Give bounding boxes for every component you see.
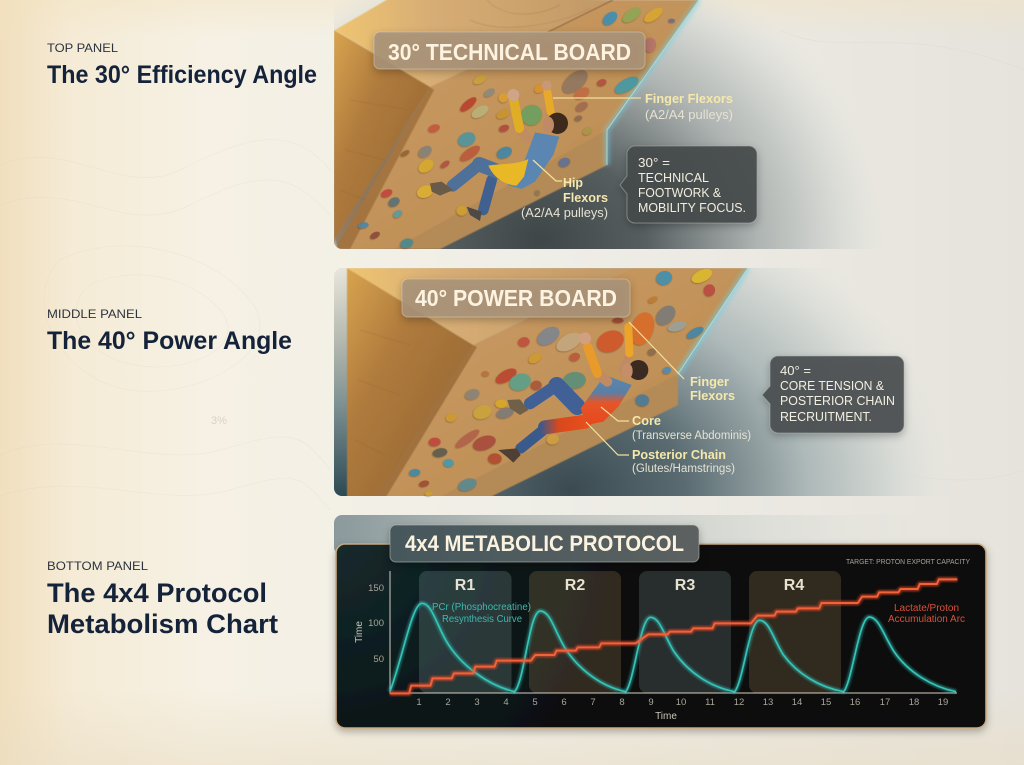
heading: bottom panel	[47, 559, 278, 639]
axes: 19	[938, 697, 948, 708]
axes: 4	[503, 697, 509, 708]
heading: bottom panel: Metabolism Chart	[47, 609, 278, 639]
axes: 150	[368, 583, 384, 594]
climber with highlighted finger and hip flexors	[430, 81, 568, 221]
label: finger flexors: Finger Flexors	[645, 91, 733, 106]
heading: middle panel	[47, 307, 292, 355]
axes: 100	[368, 618, 384, 629]
round columns: R3	[675, 577, 695, 594]
chart card	[336, 544, 986, 728]
badge: 30 degree technical board: 30° TECHNICAL BOARD	[388, 39, 631, 65]
panel backdrop	[334, 515, 954, 555]
panel: 30 degree technical board	[334, 0, 856, 250]
axes: 15	[821, 697, 831, 708]
round columns: R2	[565, 577, 585, 594]
axes: 12	[734, 697, 744, 708]
curve label: PCr	[432, 602, 531, 625]
label: hip flexors	[521, 160, 608, 220]
axes: 6	[561, 697, 567, 708]
axes: 8	[619, 697, 625, 708]
heading: top panel: TOP PANEL	[47, 41, 118, 55]
round columns: R4	[784, 577, 804, 594]
callout: core tension: RECRUITMENT.	[780, 409, 872, 424]
target note: TARGET: PROTON EXPORT CAPACITY	[846, 557, 970, 566]
badge: 40 degree power board	[402, 279, 630, 317]
callout: core tension	[762, 356, 904, 433]
axes: 1	[416, 697, 422, 708]
label: hip flexors: Flexors	[563, 190, 608, 205]
curve label: lactate: Accumulation Arc	[888, 614, 965, 625]
PCr resynthesis curve	[390, 603, 956, 692]
heading: middle panel: The 40° Power Angle	[47, 327, 292, 355]
panel backdrop	[334, 268, 974, 496]
label: hip flexors: (A2/A4 pulleys)	[521, 206, 608, 220]
edge glow	[678, 268, 748, 374]
label: core: Core	[632, 413, 661, 428]
badge: 4x4 metabolic protocol: 4x4 METABOLIC PROTOCOL	[405, 531, 684, 556]
label: posterior chain	[586, 422, 735, 475]
climbing holds	[408, 266, 716, 496]
axes: Time	[655, 711, 677, 722]
label: core: (Transverse Abdominis)	[632, 430, 751, 442]
label: finger flexors: Finger	[690, 374, 729, 389]
climber with highlighted core and posterior chain	[498, 327, 648, 463]
axes: 18	[909, 697, 919, 708]
lactate accumulation step line	[390, 579, 957, 693]
heading: bottom panel: BOTTOM PANEL	[47, 559, 148, 573]
label: core	[601, 407, 751, 442]
label: posterior chain: (Glutes/Hamstrings)	[632, 463, 735, 475]
axes: 17	[880, 697, 890, 708]
axes: 2	[445, 697, 451, 708]
edge glow	[607, 0, 699, 165]
label: hip flexors: Hip	[563, 175, 583, 190]
climbing wall	[347, 268, 748, 497]
callout: core tension: POSTERIOR CHAIN	[780, 393, 895, 408]
curve label: PCr: PCr (Phosphocreatine)	[432, 602, 531, 613]
axes	[354, 571, 957, 722]
heading: bottom panel: The 4x4 Protocol	[47, 578, 267, 608]
callout: technical footwork	[620, 146, 757, 223]
callout: core tension: 40° =	[780, 363, 811, 378]
callout: core tension: CORE TENSION &	[780, 378, 884, 393]
panel backdrop	[334, 0, 856, 249]
round columns: R1	[455, 577, 475, 594]
climbing holds	[358, 5, 675, 250]
axes: 11	[705, 697, 715, 708]
axes: 14	[792, 697, 802, 708]
badge: 40 degree power board: 40° POWER BOARD	[415, 285, 617, 311]
round columns	[419, 571, 841, 693]
curve label: PCr: Resynthesis Curve	[442, 614, 522, 625]
axes: 13	[763, 697, 773, 708]
axes: 16	[850, 697, 860, 708]
axes: 7	[590, 697, 596, 708]
axes: 5	[532, 697, 538, 708]
curve label: lactate: Lactate/Proton	[894, 603, 959, 614]
axes: 50	[373, 654, 384, 665]
axes: 10	[676, 697, 686, 708]
axes: 9	[648, 697, 654, 708]
curve label: lactate	[888, 603, 965, 625]
callout: technical footwork: 30° =	[638, 155, 670, 170]
faint stray label: 3%	[211, 415, 227, 427]
callout: technical footwork: FOOTWORK &	[638, 185, 721, 200]
callout: technical footwork: TECHNICAL	[638, 170, 709, 185]
badge: 30 degree technical board	[374, 32, 645, 69]
heading: top panel	[47, 41, 317, 89]
callout: technical footwork: MOBILITY FOCUS.	[638, 200, 746, 215]
badge: 4x4 metabolic protocol	[390, 525, 699, 562]
label: finger flexors: Flexors	[690, 388, 735, 403]
panel: 4x4 metabolic protocol chart	[334, 515, 986, 728]
label: posterior chain: Posterior Chain	[632, 447, 726, 462]
axes: 3	[474, 697, 480, 708]
climbing wall	[334, 0, 699, 249]
heading: middle panel: MIDDLE PANEL	[47, 307, 142, 321]
label: finger flexors	[553, 91, 733, 122]
axes: Time	[354, 621, 365, 643]
label: finger flexors: (A2/A4 pulleys)	[645, 108, 733, 122]
heading: top panel: The 30° Efficiency Angle	[47, 61, 317, 89]
panel: 40 degree power board	[334, 266, 974, 497]
label: finger flexors	[629, 322, 735, 403]
